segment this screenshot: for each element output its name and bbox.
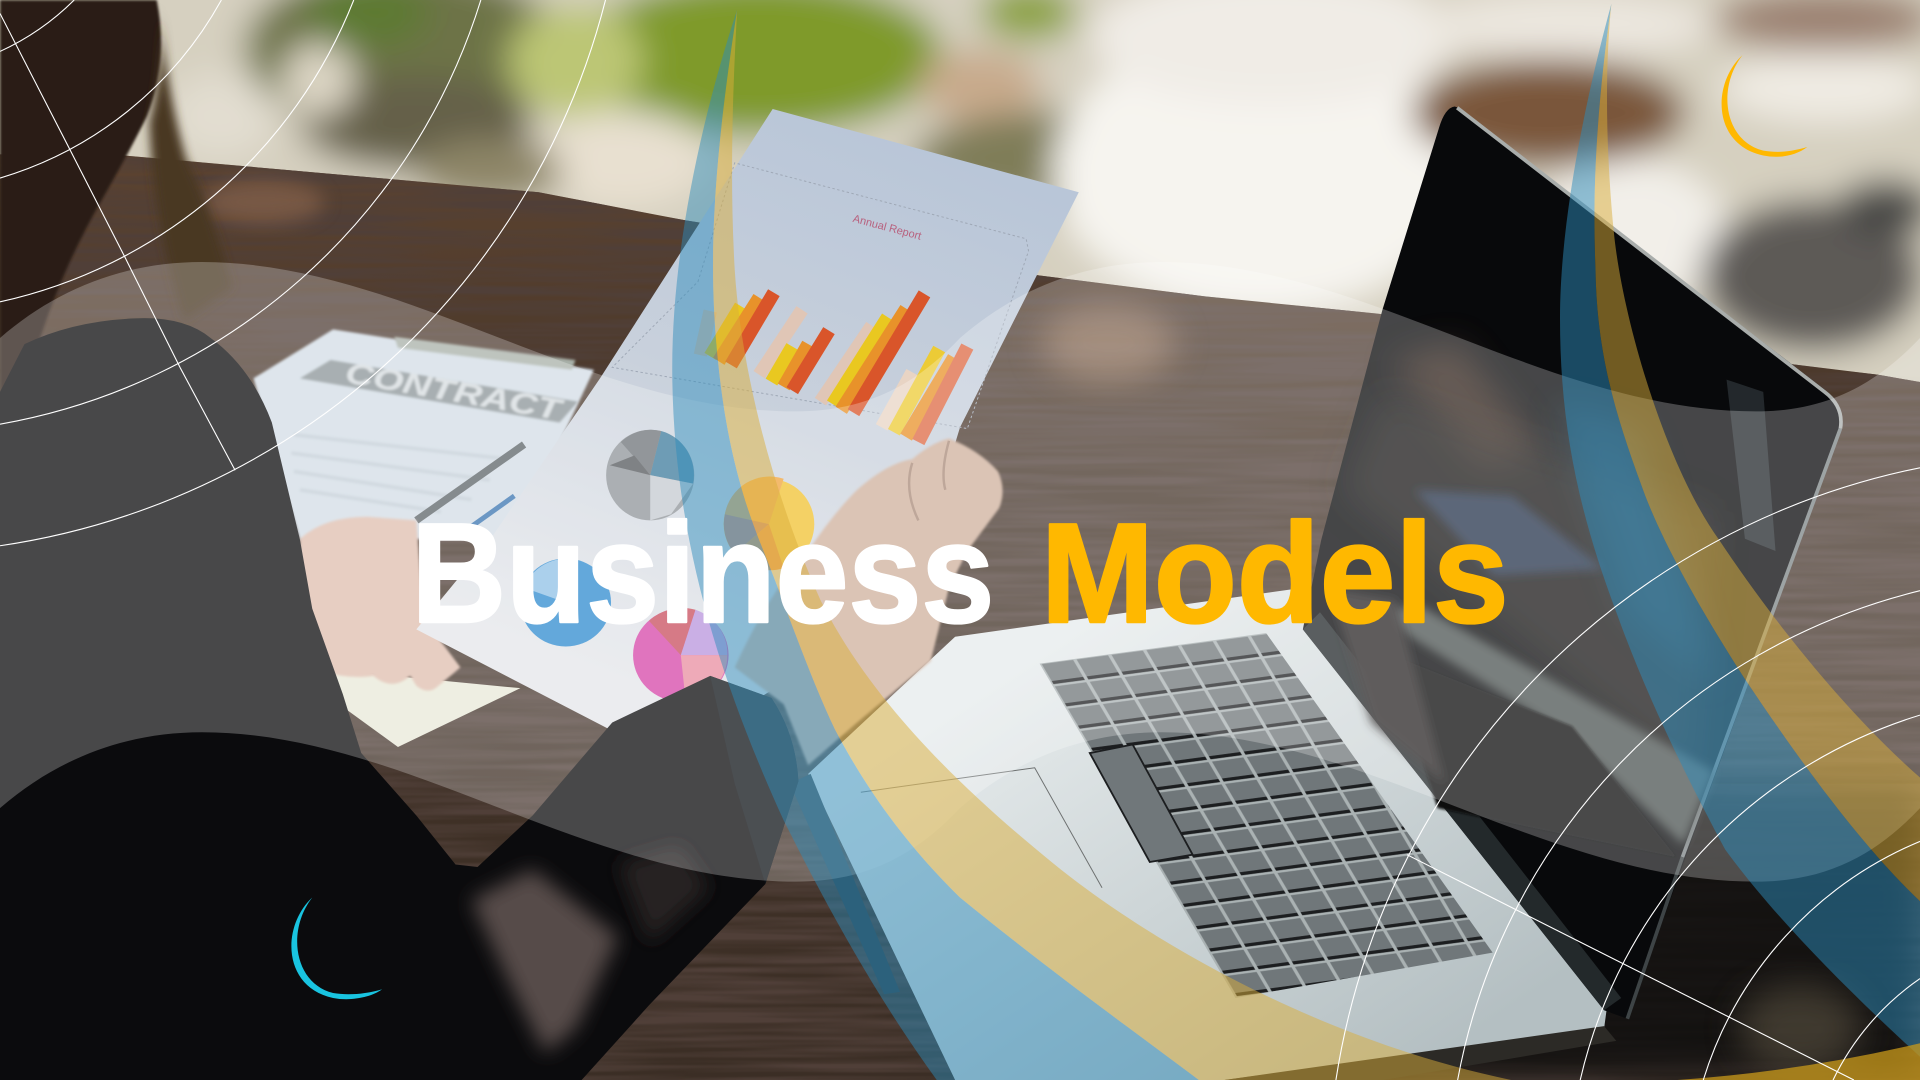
blue ribbon left <box>672 10 1199 1080</box>
laptop side shadow <box>790 774 900 994</box>
finger shadows <box>909 441 949 520</box>
gold ribbon left <box>713 10 1511 1080</box>
keyboard <box>1040 633 1493 998</box>
blurred garden backdrop <box>0 0 1920 416</box>
hair of the woman <box>0 0 233 404</box>
blue ribbon right <box>1560 4 1920 1057</box>
blue pie chart <box>520 558 611 647</box>
trackpad <box>861 768 1102 888</box>
left hand <box>300 517 460 691</box>
right swoosh <box>1560 4 1920 1080</box>
title word: Models: Models <box>1041 494 1509 653</box>
sleeve folds <box>471 845 710 1053</box>
screen reflections <box>1329 343 1776 857</box>
icon: cyan crescent <box>291 898 382 999</box>
clipboard clip <box>394 337 576 370</box>
grey pie chart <box>606 430 694 520</box>
note paper under hand <box>316 669 520 747</box>
laptop <box>790 107 1841 1080</box>
translucent wave band <box>0 262 1920 882</box>
icon: gold crescent <box>1722 55 1807 157</box>
chart title: Annual Report <box>851 213 923 243</box>
line globe: bottom right <box>1336 468 1920 1080</box>
contract banner <box>300 356 578 427</box>
gold ribbon bottom <box>1678 1043 1920 1080</box>
line globe: top left <box>0 0 606 546</box>
laptop screen <box>1303 107 1841 1019</box>
bar chart <box>700 293 967 442</box>
cuff tint <box>710 676 798 884</box>
laptop base <box>808 588 1607 1080</box>
suit of the woman <box>0 318 798 1080</box>
left swoosh <box>672 10 1511 1080</box>
right hand and forearm <box>735 438 1003 765</box>
title <box>411 494 1509 653</box>
contract document <box>253 329 594 540</box>
pens <box>416 444 524 520</box>
title word: Business: Business <box>411 494 994 653</box>
report sheet <box>416 109 1079 737</box>
contract banner: CONTRACT <box>343 356 567 427</box>
magenta pie chart <box>633 608 729 702</box>
gold ribbon right <box>1594 4 1920 901</box>
space bar <box>1090 744 1193 862</box>
orange pie chart <box>724 477 814 570</box>
